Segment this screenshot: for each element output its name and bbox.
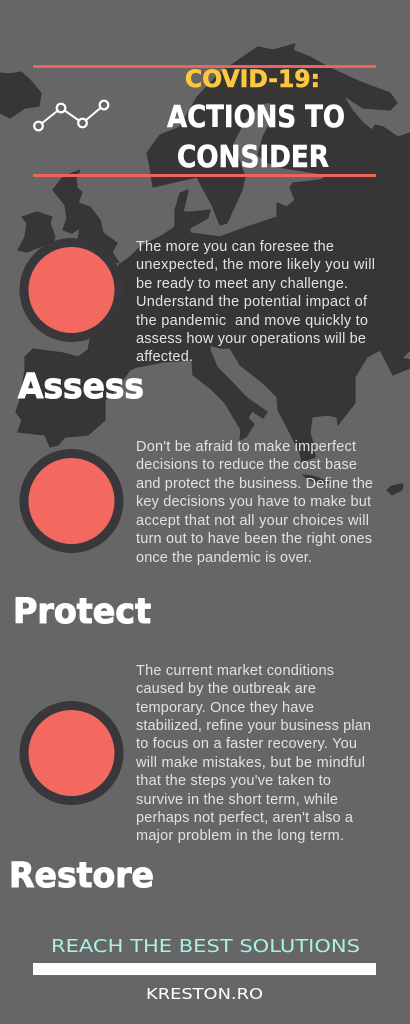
circle: protect [24, 454, 119, 548]
text: restore description: caused by the outbreak are [136, 681, 316, 697]
text: restore description: The current market conditions [136, 663, 334, 679]
text: restore description: major problem in the long term. [136, 828, 344, 844]
heading: protect: Protect [13, 592, 151, 632]
circle: assess [24, 242, 119, 338]
text: assess description: The more you can foresee the [136, 239, 334, 255]
text: protect description [136, 439, 373, 566]
text: restore description: temporary. Once they have [136, 700, 314, 716]
text: assess description: Understand the potential impact of [136, 294, 368, 310]
map of Europe [0, 44, 410, 495]
footer tagline: REACH THE BEST SOLUTIONS [51, 936, 360, 957]
title [167, 65, 345, 175]
title: COVID-19: [185, 65, 320, 93]
text: restore description [135, 663, 371, 844]
text: assess description [136, 239, 375, 365]
title: CONSIDER [177, 140, 329, 175]
text: restore description: to focus on a faster recovery. You [136, 736, 357, 752]
text: protect description: turn out to have been the right ones [136, 531, 372, 547]
header rule bottom [33, 174, 376, 177]
text: assess description: the pandemic and move quickly to [136, 313, 368, 329]
text: restore description: survive in the short term, while [136, 792, 338, 808]
heading: assess: Assess [18, 367, 144, 407]
heading: restore: Restore [9, 856, 154, 896]
footer bar [33, 963, 376, 975]
text: assess description: be ready to meet any challenge. [136, 276, 348, 292]
footer website: KRESTON.RO [146, 985, 263, 1003]
text: assess description: affected. [136, 349, 193, 365]
text: assess description: unexpected, the more likely you will [136, 257, 375, 273]
text: assess description: assess how your operations will be [136, 331, 366, 347]
icon: line chart [34, 101, 108, 130]
text: restore description: perhaps not perfect, aren't also a [136, 810, 354, 826]
header rule top [33, 65, 376, 68]
text: protect description: and protect the business. Define the [136, 476, 373, 492]
text: restore description: that the steps you've taken to [136, 773, 331, 789]
circle: restore [24, 706, 119, 800]
title: ACTIONS TO [167, 100, 345, 135]
text: protect description: key decisions you have to make but [136, 494, 371, 510]
text: restore description: stabilized, refine your business plan [136, 718, 371, 734]
text: protect description: Don't be afraid to make imperfect [136, 439, 356, 455]
text: restore description: will make mistakes, but be mindful [135, 755, 365, 771]
text: protect description: decisions to reduce the cost base [136, 457, 357, 473]
text: protect description: once the pandemic is over. [136, 550, 312, 566]
text: protect description: accept that not all your choices will [136, 513, 369, 529]
